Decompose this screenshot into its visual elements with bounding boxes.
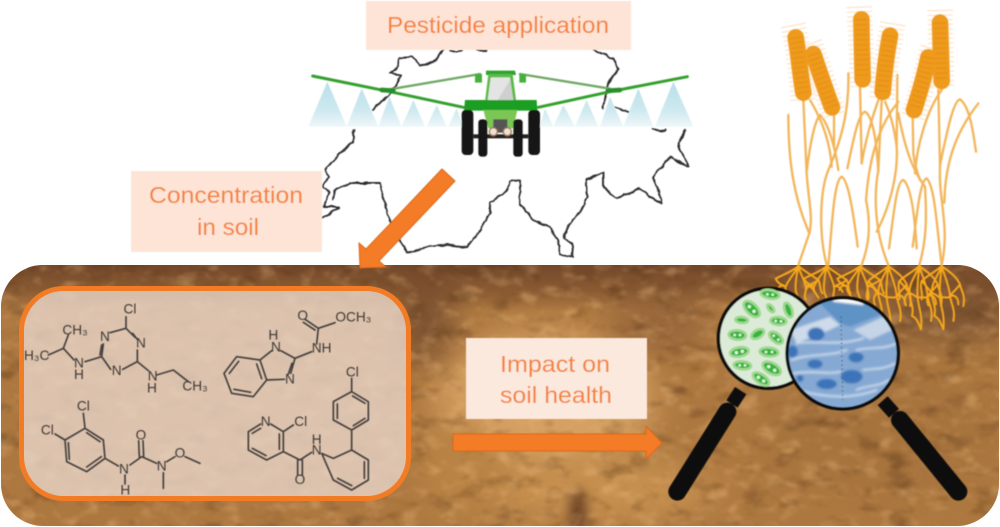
- label: concentration in soil: Concentration: [149, 182, 303, 208]
- label: impact on soil health: soil health: [500, 382, 612, 408]
- molecule: atrazine: N: [100, 329, 110, 344]
- molecule: boscalid: N: [261, 414, 271, 429]
- molecules: [24, 301, 371, 498]
- molecule: boscalid: N: [312, 443, 322, 458]
- molecule: linuron: O: [136, 427, 146, 442]
- molecule: atrazine: N: [148, 369, 158, 384]
- spray cones: [308, 82, 693, 127]
- label: pesticide application: [366, 1, 631, 50]
- magnifying glasses: [677, 288, 958, 492]
- molecule: boscalid: [248, 365, 368, 490]
- molecule: atrazine: Cl: [124, 301, 136, 316]
- magnifier: stained tissue: [787, 293, 900, 409]
- wheat stems: [788, 73, 978, 265]
- molecule: carbendazim: N: [285, 371, 295, 386]
- molecule: atrazine: H₃C: [24, 348, 49, 363]
- molecule: linuron: O: [175, 445, 185, 460]
- molecule: carbendazim: N: [271, 339, 281, 354]
- molecule: atrazine: CH₃: [62, 322, 88, 337]
- soil panel: [0, 255, 1000, 527]
- wheat awns: [793, 7, 942, 117]
- molecule: atrazine: N: [112, 363, 122, 378]
- label: concentration in soil: [131, 171, 322, 252]
- arrow: molecules to soil health: [453, 426, 662, 459]
- label: impact on soil health: Impact on: [500, 351, 610, 377]
- wheat roots: [776, 266, 964, 329]
- spray booms: [313, 74, 687, 107]
- label: pesticide application: Pesticide application: [387, 12, 609, 38]
- ear texture: [796, 19, 942, 110]
- molecule: boscalid: Cl: [294, 414, 307, 429]
- molecule: boscalid: Cl: [346, 365, 359, 380]
- molecule: carbendazim: [224, 308, 371, 397]
- magnifier handles: [677, 391, 958, 492]
- molecule: atrazine: H: [74, 367, 84, 382]
- molecule: carbendazim: O: [297, 308, 308, 323]
- molecule: linuron: Cl: [41, 423, 54, 438]
- tractor with spray boom: [308, 71, 693, 157]
- arrow: application to soil: [359, 169, 455, 268]
- wheat ears: [796, 19, 942, 110]
- molecule: carbendazim: OCH₃: [335, 309, 371, 324]
- magnifier: green algae: [718, 288, 818, 388]
- label: impact on soil health: [466, 338, 647, 419]
- molecule: atrazine: N: [74, 355, 84, 370]
- label: concentration in soil: in soil: [197, 214, 259, 240]
- molecule: boscalid: H: [312, 432, 322, 447]
- molecule: linuron: H: [120, 483, 130, 498]
- molecule: atrazine: N: [136, 336, 146, 351]
- molecule: boscalid: O: [295, 472, 305, 487]
- molecule: carbendazim: H: [268, 327, 278, 342]
- wheat plants: [776, 7, 978, 329]
- molecule: atrazine: H: [147, 381, 157, 396]
- molecule: carbendazim: NH: [312, 341, 332, 356]
- molecule: atrazine: [24, 301, 208, 396]
- molecule: linuron: [41, 399, 200, 498]
- molecule: linuron: Cl: [77, 399, 90, 414]
- tractor body: [462, 71, 540, 157]
- panel: pesticide molecules: [22, 288, 408, 498]
- molecule: linuron: N: [157, 459, 167, 474]
- molecule: atrazine: CH₃: [182, 379, 208, 394]
- molecule: linuron: N: [119, 461, 129, 476]
- map of Switzerland: [323, 50, 688, 257]
